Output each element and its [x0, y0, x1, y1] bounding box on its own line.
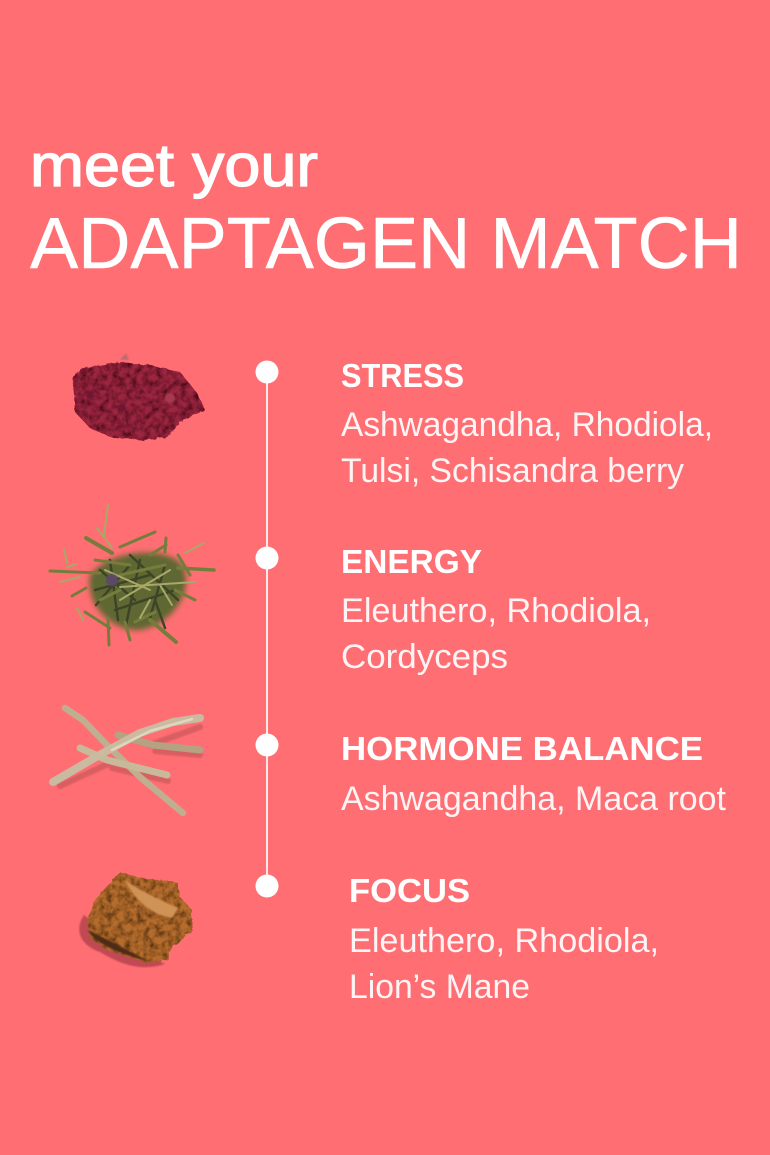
timeline [256, 360, 278, 898]
icon: pale root sticks [53, 708, 200, 813]
text block: stress: Ashwagandha, Rhodiola, [341, 406, 713, 444]
icon: green herb pile [50, 505, 214, 645]
text block: stress: Tulsi, Schisandra berry [341, 452, 684, 490]
text block: energy [341, 543, 651, 676]
title: meet your [30, 132, 318, 199]
text block: stress: STRESS [341, 357, 464, 394]
text block: hormone balance [341, 730, 727, 818]
text block: hormone balance: HORMONE BALANCE [341, 730, 703, 767]
text block: hormone balance: Ashwagandha, Maca root [341, 780, 727, 818]
text block: energy: Cordyceps [341, 638, 508, 676]
icon: brown rock [79, 872, 192, 967]
title [30, 132, 742, 284]
icon: red powder [73, 353, 205, 440]
text block: energy: Eleuthero, Rhodiola, [341, 592, 651, 630]
text block: focus [349, 872, 659, 1006]
text block: energy: ENERGY [341, 543, 482, 580]
title: ADAPTAGEN MATCH [30, 203, 742, 284]
text block: focus: Eleuthero, Rhodiola, [349, 922, 659, 960]
text block: focus: FOCUS [349, 872, 470, 909]
text block: stress [341, 357, 713, 490]
text block: focus: Lion’s Mane [349, 968, 530, 1006]
